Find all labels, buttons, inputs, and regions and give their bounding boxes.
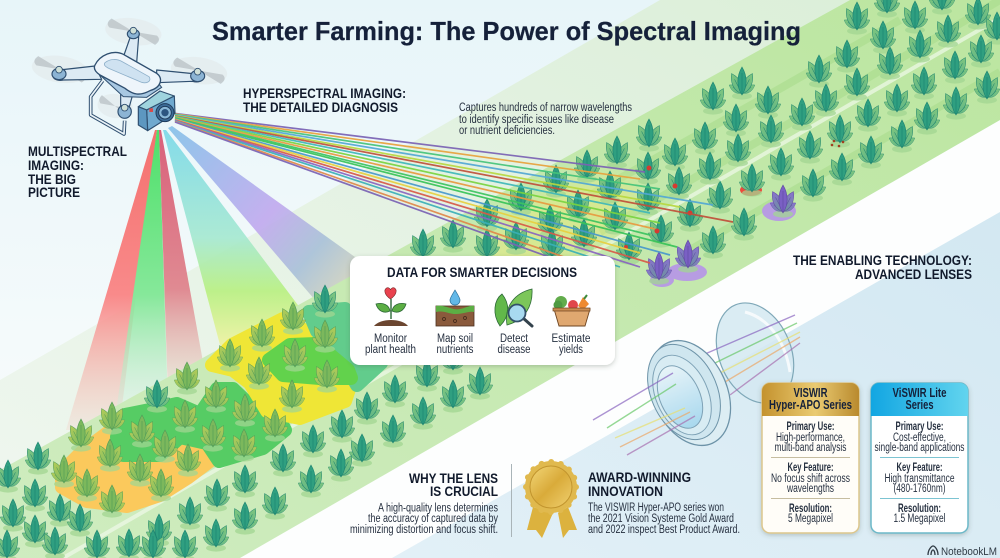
heading: hyperspectral <box>243 86 406 115</box>
label: map soil nutrients: nutrients <box>436 344 474 356</box>
rotors <box>30 15 229 120</box>
motors <box>52 29 205 118</box>
arms <box>53 36 204 107</box>
light rays exiting lens <box>705 315 800 395</box>
panel: data for smarter decisions <box>350 256 615 365</box>
camera <box>138 91 174 110</box>
text: hyperspectral description: Captures hundreds of narrow wavelengths <box>459 102 632 114</box>
why the lens is crucial: minimizing distortion and focus shift. <box>350 524 498 536</box>
white diagonal band <box>240 120 1000 558</box>
card: ViSWIR Lite series: ViSWIR Lite <box>892 386 947 400</box>
why the lens is crucial: A high-quality lens determines <box>378 502 498 514</box>
heading: enabling technology: ADVANCED LENSES <box>855 267 972 282</box>
why the lens is crucial: WHY THE LENS <box>409 471 498 486</box>
pale field band <box>0 0 850 470</box>
card: VISWIR Hyper-APO series: VISWIR <box>794 386 828 400</box>
label: monitor plant health: Monitor <box>374 333 407 345</box>
card: ViSWIR Lite series: Cost-effective, <box>893 432 946 444</box>
front lens element <box>634 328 746 458</box>
rear lens element <box>702 291 808 415</box>
text: hyperspectral description <box>459 102 632 137</box>
label: estimate yields: yields <box>559 344 583 356</box>
heading: multispectral: THE BIG <box>28 172 76 187</box>
text: hyperspectral description: or nutrient deficiencies. <box>459 125 555 137</box>
award-winning innovation <box>588 470 740 536</box>
stress markers in field <box>640 173 796 287</box>
drone <box>30 15 229 134</box>
why the lens is crucial <box>350 471 498 536</box>
card: VISWIR Hyper-APO series <box>762 383 859 533</box>
label: estimate yields: Estimate <box>552 333 590 345</box>
light rays entering lens <box>593 373 695 455</box>
icon: harvest basket <box>553 295 590 326</box>
title: Smarter Farming: The Power of Spectral Imaging <box>212 16 801 46</box>
label: monitor plant health <box>365 333 416 356</box>
heading: multispectral: IMAGING: <box>28 158 84 173</box>
card: ViSWIR Lite series: single-band applications <box>874 442 965 454</box>
award-winning innovation: and 2022 inspect Best Product Award. <box>588 524 740 536</box>
card: VISWIR Hyper-APO series: High-performance, <box>776 432 845 444</box>
icon: gold award medal <box>525 461 577 538</box>
why the lens is crucial: IS CRUCIAL <box>430 484 498 499</box>
icon: leaf and magnifier <box>495 289 532 326</box>
skids <box>91 81 125 134</box>
text: hyperspectral description: to identify specific issues like disease <box>459 114 614 126</box>
multispectral beams <box>66 126 415 430</box>
heading: multispectral: MULTISPECTRAL <box>28 144 127 159</box>
card: ViSWIR Lite series: 1.5 Megapixel <box>894 513 946 525</box>
heading: enabling technology <box>793 253 972 282</box>
multispectral heat map patches <box>62 309 381 506</box>
card: ViSWIR Lite series: (480-1760nm) <box>894 483 946 495</box>
label: monitor plant health: plant health <box>365 344 416 356</box>
under body <box>100 75 162 97</box>
award-winning innovation: INNOVATION <box>588 484 663 499</box>
card: VISWIR Hyper-APO series: 5 Megapixel <box>788 513 833 525</box>
card: ViSWIR Lite series: Primary Use: <box>896 421 944 433</box>
card: VISWIR Hyper-APO series: Primary Use: <box>786 421 834 433</box>
body <box>94 52 160 94</box>
card: ViSWIR Lite series <box>871 383 968 533</box>
card: ViSWIR Lite series: Series <box>906 398 934 412</box>
card: VISWIR Hyper-APO series: Resolution: <box>789 503 832 515</box>
label: detect disease <box>498 333 530 356</box>
label: map soil nutrients: Map soil <box>437 333 473 345</box>
heading: hyperspectral: HYPERSPECTRAL IMAGING: <box>243 86 406 101</box>
icon: soil with water drop <box>436 290 474 326</box>
label: detect disease: Detect <box>500 333 529 345</box>
disease spots on leaves <box>624 140 844 249</box>
label: detect disease: disease <box>498 344 530 356</box>
heading: hyperspectral: THE DETAILED DIAGNOSIS <box>243 100 398 115</box>
card: ViSWIR Lite series: Key Feature: <box>896 462 942 474</box>
award-winning innovation: AWARD-WINNING <box>588 470 691 485</box>
card: VISWIR Hyper-APO series: Key Feature: <box>788 462 834 474</box>
card: ViSWIR Lite series: Resolution: <box>898 503 941 515</box>
award-winning innovation: The VISWIR Hyper-APO series won <box>588 502 724 514</box>
card: VISWIR Hyper-APO series: No focus shift across <box>771 473 850 485</box>
plants: over heat map <box>49 302 342 518</box>
blue lens area background <box>392 212 1000 558</box>
heading: multispectral: PICTURE <box>28 185 80 200</box>
card: VISWIR Hyper-APO series: multi-band analysis <box>774 442 847 454</box>
panel heading: DATA FOR SMARTER DECISIONS <box>387 265 577 280</box>
card: VISWIR Hyper-APO series: Hyper-APO Series <box>769 398 852 412</box>
heading: multispectral <box>28 144 127 200</box>
why the lens is crucial: the accuracy of captured data by <box>368 513 498 525</box>
card: ViSWIR Lite series: High transmittance <box>884 473 954 485</box>
heading: enabling technology: THE ENABLING TECHNOLOGY: <box>793 253 972 268</box>
icon: plant with heart <box>374 288 408 326</box>
hyperspectral rainbow lines <box>175 114 733 279</box>
card: VISWIR Hyper-APO series: wavelengths <box>786 483 834 495</box>
label: map soil nutrients <box>436 333 474 356</box>
award-winning innovation: the 2021 Vision Systeme Gold Award <box>588 513 734 525</box>
plants: diseased purple <box>644 185 798 285</box>
label: estimate yields <box>552 333 590 356</box>
